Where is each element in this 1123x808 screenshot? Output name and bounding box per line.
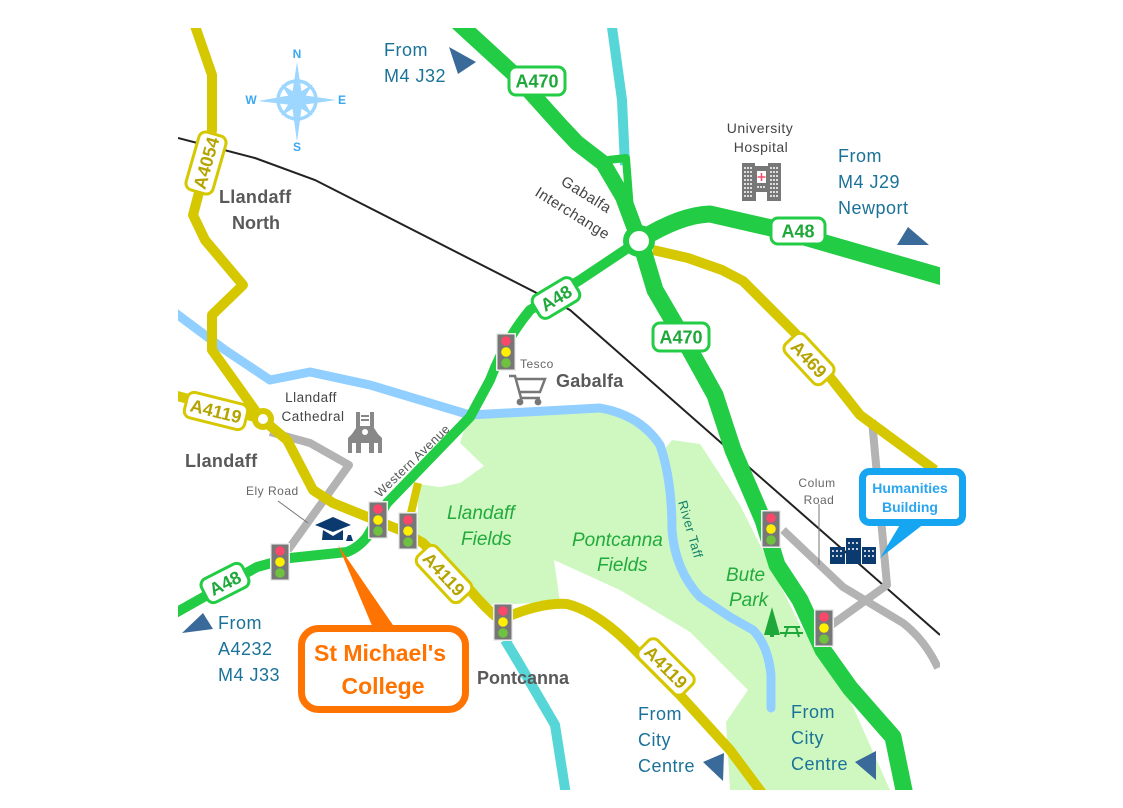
area labels: Llandaff — [219, 187, 292, 207]
area labels: North — [232, 213, 280, 233]
label A4054 — [184, 130, 228, 196]
label A470 north — [509, 67, 565, 95]
road A470 branch — [608, 158, 630, 210]
label A48 east: A48 — [781, 222, 815, 242]
University Hospital label: Hospital — [734, 139, 788, 155]
callout: Humanities Building: Building — [882, 499, 938, 515]
road A469 — [653, 250, 935, 470]
river: teal sections — [505, 20, 625, 795]
from M4 J29 Newport: Newport — [838, 198, 909, 218]
road A4119 — [170, 394, 765, 797]
label A4119 south: A4119 — [640, 642, 691, 693]
Gabalfa Interchange label: Interchange — [532, 184, 613, 243]
traffic light: Tesco — [496, 333, 516, 371]
arrow: from A4232 — [182, 613, 213, 633]
callout: St Michael's College — [302, 545, 466, 710]
label A4054: A4054 — [190, 135, 223, 191]
label A4119 west — [183, 391, 249, 431]
park labels: Bute — [726, 565, 765, 586]
area labels: Gabalfa — [556, 371, 624, 391]
park labels: Park — [729, 590, 770, 611]
from A4232 M4 J33 — [218, 613, 280, 685]
area labels — [185, 187, 624, 688]
Gabalfa roundabout — [626, 228, 652, 254]
from M4 J29 Newport: From — [838, 146, 882, 166]
arrow: from City Centre east — [855, 751, 876, 780]
Western Avenue label: Western Avenue — [372, 422, 453, 500]
park labels: Llandaff — [447, 503, 516, 524]
label A470 south — [653, 323, 709, 351]
icon: hospital — [742, 163, 781, 201]
road A470 south — [640, 240, 906, 800]
from City Centre west: From — [638, 704, 682, 724]
road A470 north — [455, 20, 639, 240]
from City Centre east — [791, 702, 848, 774]
icon: Humanities Building — [830, 538, 876, 564]
traffic light: Bute Park — [814, 609, 834, 647]
road A48 east — [640, 214, 950, 279]
from City Centre west: City — [638, 730, 671, 750]
from City Centre east: Centre — [791, 754, 848, 774]
icon: compass rose: N — [293, 47, 301, 61]
label A469 — [781, 330, 837, 388]
Llandaff roundabout — [255, 411, 271, 427]
arrow: from M4 J29 — [897, 227, 929, 245]
icon: compass rose — [245, 47, 346, 154]
icon: compass rose: W — [245, 93, 257, 107]
road stub — [407, 482, 422, 512]
label A48 middle: A48 — [537, 281, 576, 316]
River Taff label: River Taff — [675, 499, 706, 560]
traffic light: Colum Road — [761, 510, 781, 548]
label A470 north: A470 — [515, 72, 559, 92]
area labels: Pontcanna — [477, 668, 570, 688]
Llandaff Cathedral label: Cathedral — [281, 409, 345, 424]
label A4119 centre: A4119 — [419, 548, 469, 600]
grey minor roads — [270, 420, 938, 668]
railway line — [178, 138, 940, 635]
park labels — [447, 503, 770, 611]
Llandaff Cathedral label — [281, 390, 345, 424]
University Hospital label: University — [727, 120, 793, 136]
from City Centre west — [638, 704, 695, 776]
arrow: from City Centre west — [703, 753, 724, 781]
label A4119 centre — [413, 542, 475, 606]
callout: Humanities Building — [862, 472, 962, 558]
label A48 west — [199, 561, 251, 605]
Ely Road label: Ely Road — [246, 484, 299, 498]
traffic light: A4119 — [398, 512, 418, 550]
Colum Road label: Road — [804, 493, 834, 507]
icon: shopping cart — [509, 376, 545, 405]
green roads — [170, 20, 950, 800]
from M4 J32: From — [384, 40, 428, 60]
callout: Humanities Building: Humanities — [872, 480, 948, 496]
from City Centre east: City — [791, 728, 824, 748]
icon: college mortarboard — [315, 517, 353, 541]
map roads and rivers — [170, 20, 950, 800]
arrow: from M4 J32 — [449, 47, 476, 74]
traffic light: Ely Road — [270, 543, 290, 581]
label A470 south: A470 — [659, 328, 703, 348]
callout: St Michael's College: St Michael's — [314, 640, 446, 666]
Colum Road label — [798, 476, 836, 507]
from M4 J29 Newport — [838, 146, 909, 218]
from A4232 M4 J33: From — [218, 613, 262, 633]
road A48 west — [170, 240, 640, 616]
river Taff — [170, 309, 771, 708]
park area — [418, 408, 890, 790]
traffic light: Western Avenue — [368, 501, 388, 539]
from A4232 M4 J33: A4232 — [218, 639, 273, 659]
label A48 east — [771, 218, 825, 244]
Colum Road leader — [818, 504, 820, 565]
park labels: Fields — [461, 529, 512, 550]
from M4 J29 Newport: M4 J29 — [838, 172, 900, 192]
University Hospital label — [727, 120, 793, 155]
from M4 J32: M4 J32 — [384, 66, 446, 86]
from M4 J32 — [384, 40, 446, 86]
Gabalfa Interchange label: Gabalfa — [558, 173, 615, 217]
yellow roads — [170, 20, 935, 797]
label A48 middle — [530, 275, 582, 321]
label A4119 south — [635, 636, 697, 698]
Llandaff Cathedral label: Llandaff — [285, 390, 337, 405]
from A4232 M4 J33: M4 J33 — [218, 665, 280, 685]
from City Centre west: Centre — [638, 756, 695, 776]
from City Centre east: From — [791, 702, 835, 722]
label A469: A469 — [787, 337, 831, 382]
road A4054 — [193, 20, 262, 420]
area labels: Llandaff — [185, 451, 258, 471]
park labels: Fields — [597, 555, 648, 576]
traffic light: Pontcanna — [493, 603, 513, 641]
label A4119 west: A4119 — [188, 395, 244, 427]
Tesco label: Tesco — [520, 357, 554, 371]
park labels: Pontcanna — [572, 530, 663, 551]
icon: picnic tree — [764, 607, 803, 637]
icon: compass rose: E — [338, 93, 346, 107]
callout: St Michael's College: College — [341, 673, 425, 699]
Colum Road label: Colum — [798, 476, 836, 490]
label A48 west: A48 — [206, 567, 244, 600]
icon: cathedral — [348, 412, 382, 453]
Ely Road leader — [278, 501, 308, 523]
icon: compass rose: S — [293, 140, 301, 154]
